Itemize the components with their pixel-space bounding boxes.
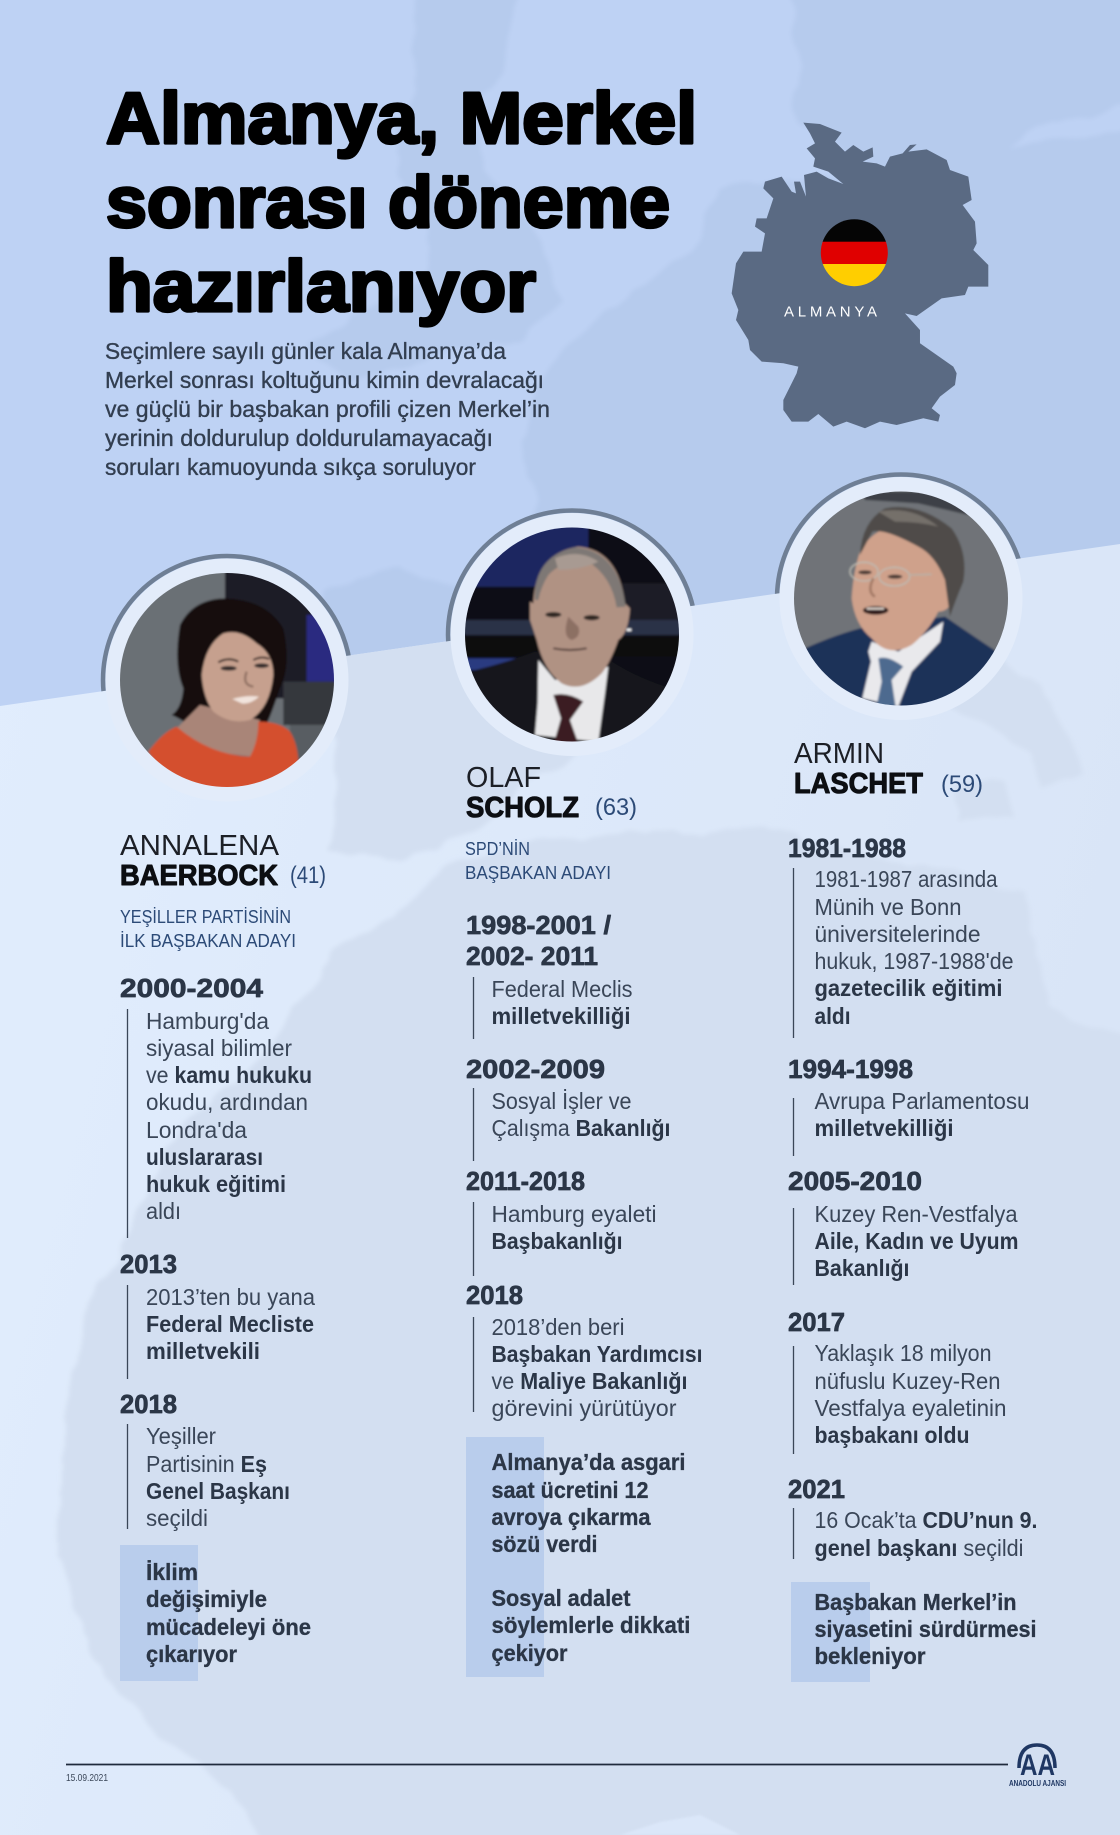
candidate role: Scholz: SPD’NİN (465, 839, 530, 859)
logo: Anadolu Ajansı (1009, 1745, 1066, 1788)
candidate name: Baerbock: BAERBOCK (120, 860, 278, 892)
intro paragraph: soruları kamuoyunda sıkça soruluyor (105, 454, 476, 480)
timeline: Baerbock: seçildi (146, 1505, 208, 1531)
candidate name: Scholz: OLAF (466, 762, 541, 794)
candidate name: Baerbock: ANNALENA (120, 830, 280, 862)
timeline: Scholz: 2011-2018 (466, 1166, 585, 1196)
timeline: Laschet: Yaklaşık 18 milyon (814, 1340, 992, 1366)
timeline: Scholz: milletvekilliği (492, 1003, 630, 1029)
candidate name: Scholz: (63) (595, 794, 637, 821)
portrait: Annalena Baerbock (120, 573, 334, 787)
candidate name: Baerbock (120, 830, 326, 892)
callout: Laschet (791, 1582, 1036, 1682)
intro paragraph (105, 338, 550, 480)
title: sonrası döneme (106, 163, 670, 243)
portrait rings (100, 472, 1022, 756)
timeline: Scholz: Sosyal İşler ve (492, 1088, 632, 1114)
timeline: Scholz: Federal Meclis (492, 976, 632, 1002)
title: hazırlanıyor (106, 247, 536, 327)
timeline: Baerbock: uluslararası (146, 1144, 263, 1170)
timeline: Baerbock: siyasal bilimler (146, 1035, 292, 1061)
background: lower map (0, 544, 1120, 1835)
callout: Laschet: siyasetini sürdürmesi (814, 1616, 1036, 1642)
intro paragraph: Merkel sonrası koltuğunu kimin devralacağı (105, 367, 544, 393)
candidate name: Laschet (794, 738, 983, 800)
timeline: Scholz: ve Maliye Bakanlığı (492, 1368, 688, 1394)
candidate name: Laschet: ARMIN (794, 738, 884, 770)
intro paragraph: Seçimlere sayılı günler kala Almanya’da (105, 338, 506, 364)
footer rule (66, 1764, 1008, 1766)
timeline: Laschet: Avrupa Parlamentosu (814, 1088, 1030, 1114)
country label: ALMANYA (784, 304, 877, 320)
title: Almanya, Merkel (106, 79, 697, 159)
timeline: Baerbock: 2013’ten bu yana (146, 1284, 315, 1310)
timeline: Scholz: görevini yürütüyor (492, 1395, 677, 1421)
timeline: Laschet: Vestfalya eyaletinin (814, 1395, 1006, 1421)
callout: Scholz: çekiyor (492, 1640, 568, 1666)
candidate role: Scholz (465, 839, 611, 883)
timeline: Laschet: aldı (814, 1003, 850, 1029)
timeline: Laschet (788, 833, 1038, 1561)
timeline: Laschet: başbakanı oldu (814, 1422, 970, 1448)
timeline: Scholz: 2002- 2011 (466, 941, 598, 971)
callout: Scholz: sözü verdi (492, 1531, 598, 1557)
logo: Anadolu Ajansı: ANADOLU AJANSI (1009, 1779, 1066, 1788)
timeline: Laschet: 2021 (788, 1474, 845, 1504)
map of Germany with flag (732, 123, 988, 428)
candidate role: Baerbock: YEŞİLLER PARTİSİNİN (120, 907, 291, 927)
timeline: Scholz: 2002-2009 (466, 1054, 605, 1084)
timeline: Laschet: 1981-1987 arasında (814, 866, 998, 892)
callout: Baerbock (120, 1545, 311, 1681)
candidate name: Scholz (466, 762, 637, 824)
timeline: Baerbock: 2018 (120, 1389, 177, 1419)
timeline: Scholz: Başbakanlığı (492, 1228, 622, 1254)
timeline: Laschet: Bakanlığı (814, 1255, 910, 1281)
timeline: Baerbock: 2013 (120, 1249, 177, 1279)
candidate role: Baerbock (120, 907, 296, 951)
timeline: Scholz (466, 910, 702, 1421)
callout: Laschet: Başbakan Merkel’in (814, 1589, 1016, 1615)
timeline: Scholz: 1998-2001 / (466, 910, 611, 940)
title (106, 79, 697, 327)
timeline: Baerbock: Genel Başkanı (146, 1478, 290, 1504)
flag (820, 219, 890, 288)
timeline: Scholz: 2018 (466, 1280, 523, 1310)
candidate name: Laschet: LASCHET (794, 768, 923, 800)
timeline: Laschet: 1981-1988 (788, 833, 906, 863)
timeline: Baerbock: Londra'da (146, 1117, 247, 1143)
timeline: Laschet: 2005-2010 (788, 1166, 922, 1196)
timeline: Baerbock: milletvekili (146, 1338, 260, 1364)
callout: Scholz: Sosyal adalet (492, 1585, 631, 1611)
timeline: Scholz: Çalışma Bakanlığı (492, 1115, 670, 1141)
timeline: Baerbock: ve kamu hukuku (146, 1062, 312, 1088)
timeline: Baerbock: Yeşiller (146, 1423, 216, 1449)
map shape (732, 123, 988, 428)
portrait: Armin Laschet (794, 492, 1008, 706)
timeline: Scholz: Hamburg eyaleti (492, 1201, 656, 1227)
timeline: Laschet: nüfuslu Kuzey-Ren (814, 1368, 1000, 1394)
timeline: Laschet: 2017 (788, 1307, 845, 1337)
callout: Baerbock: çıkarıyor (146, 1641, 237, 1667)
callout: Scholz: söylemlerle dikkati (492, 1612, 690, 1638)
timeline: Baerbock: Hamburg'da (146, 1008, 269, 1034)
timeline: Laschet: milletvekilliği (814, 1115, 954, 1141)
candidate name: Scholz: SCHOLZ (466, 792, 579, 824)
callout: Scholz: Almanya’da asgari (492, 1449, 686, 1475)
timeline: Scholz: 2018’den beri (492, 1314, 624, 1340)
timeline: Laschet: üniversitelerinde (814, 921, 980, 947)
timeline: Baerbock: okudu, ardından (146, 1089, 308, 1115)
intro paragraph: ve güçlü bir başbakan profili çizen Merkel’in (105, 396, 550, 422)
timeline: Laschet: genel başkanı seçildi (814, 1535, 1024, 1561)
timeline: Laschet: Münih ve Bonn (814, 894, 962, 920)
timeline: Laschet: Kuzey Ren-Vestfalya (814, 1201, 1018, 1227)
timeline: Laschet: hukuk, 1987-1988'de (814, 948, 1014, 974)
timeline: Baerbock: aldı (146, 1198, 181, 1224)
date: 15.09.2021 (66, 1772, 108, 1784)
candidate role: Baerbock: İLK BAŞBAKAN ADAYI (120, 931, 296, 951)
candidate name: Baerbock: (41) (290, 862, 326, 889)
callout: Baerbock: mücadeleyi öne (146, 1614, 311, 1640)
timeline: Baerbock: Partisinin Eş (146, 1451, 267, 1477)
timeline: Baerbock: Federal Mecliste (146, 1311, 314, 1337)
timeline: Scholz: Başbakan Yardımcısı (492, 1341, 702, 1367)
background: upper map (0, 0, 1120, 720)
timeline: Laschet: 1994-1998 (788, 1054, 913, 1084)
timeline: Laschet: Aile, Kadın ve Uyum (814, 1228, 1018, 1254)
callout: Baerbock: İklim (146, 1559, 198, 1585)
callout: Scholz: avroya çıkarma (492, 1504, 651, 1530)
candidate role: Scholz: BAŞBAKAN ADAYI (465, 863, 611, 883)
timeline: Baerbock: 2000-2004 (120, 973, 264, 1003)
timeline: Laschet: gazetecilik eğitimi (814, 975, 1002, 1001)
callout: Baerbock: değişimiyle (146, 1586, 267, 1612)
callout: Scholz: saat ücretini 12 (492, 1477, 648, 1503)
logo: Anadolu Ajansı: AA (1020, 1749, 1055, 1782)
callout: Scholz (466, 1437, 690, 1677)
candidate name: Laschet: (59) (941, 771, 983, 798)
timeline: Baerbock: hukuk eğitimi (146, 1171, 286, 1197)
intro paragraph: yerinin doldurulup doldurulamayacağı (105, 425, 493, 451)
timeline: Laschet: 16 Ocak’ta CDU’nun 9. (814, 1507, 1038, 1533)
callout: Laschet: bekleniyor (814, 1643, 926, 1669)
timeline: Baerbock (120, 973, 315, 1531)
portrait: Olaf Scholz (465, 528, 679, 742)
